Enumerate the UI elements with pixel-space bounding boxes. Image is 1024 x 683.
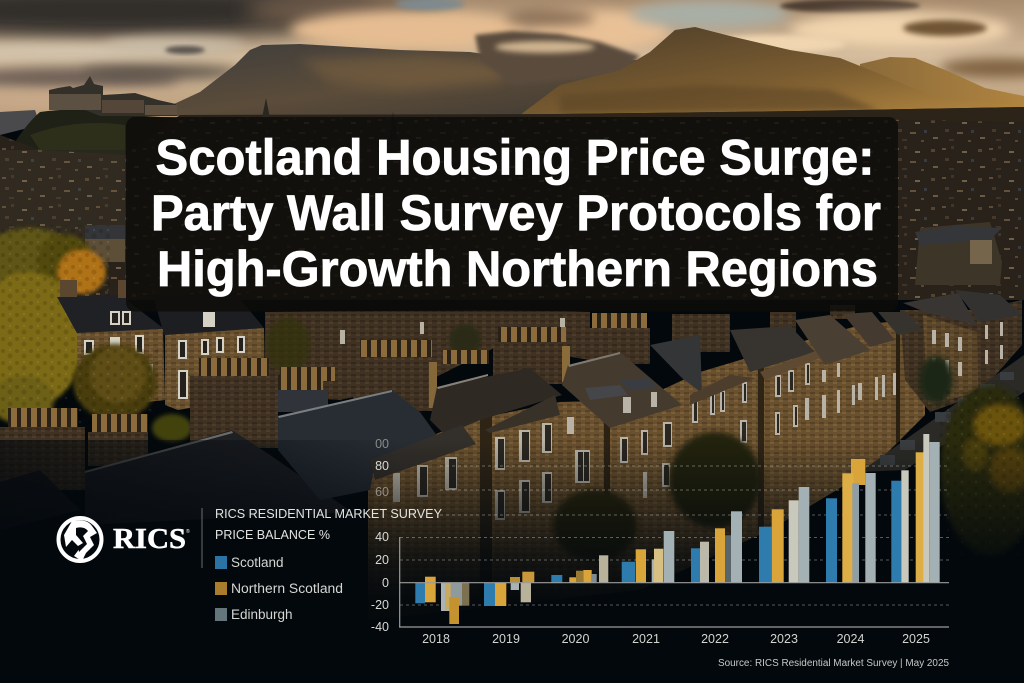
title panel: Party Wall Survey Protocols for xyxy=(151,185,881,241)
title panel: High-Growth Northern Regions xyxy=(157,241,878,297)
upper-left houses xyxy=(57,280,265,410)
year labels: 2023 xyxy=(770,632,798,646)
y axis labels: -20 xyxy=(371,598,389,612)
legend: RICS RESIDENTIAL MARKET SURVEY xyxy=(215,507,443,521)
chimney stacks xyxy=(0,305,855,490)
mountains xyxy=(148,27,1024,118)
sky with clouds xyxy=(0,0,1024,125)
title panel: Scotland Housing Price Surge: xyxy=(156,130,874,186)
distant city xyxy=(0,98,1024,300)
trees upper left xyxy=(0,225,110,425)
year labels: 2019 xyxy=(492,632,520,646)
source note: Source: RICS Residential Market Survey | May 2025 xyxy=(718,658,949,669)
divider xyxy=(202,508,203,568)
bar chart xyxy=(371,434,949,646)
y axis labels: 80 xyxy=(375,459,389,473)
bars 2021 xyxy=(622,531,674,583)
y axis labels: -40 xyxy=(371,620,389,634)
legend: Scotland xyxy=(231,555,284,570)
RICS logo: RICS xyxy=(113,524,186,555)
y axis labels: 20 xyxy=(375,553,389,567)
terrace windows xyxy=(393,322,1003,520)
y axis labels: 60 xyxy=(375,485,389,499)
legend: Northern Scotland xyxy=(231,581,343,596)
bars 2025 xyxy=(891,434,940,583)
tree by houses xyxy=(73,344,192,442)
bars 2019 xyxy=(484,572,534,606)
year labels: 2025 xyxy=(902,632,930,646)
terrace facades xyxy=(368,300,1022,620)
legend xyxy=(215,507,443,622)
castle on rock xyxy=(0,76,200,160)
middle row of houses behind chimneys xyxy=(265,310,590,400)
RICS logo xyxy=(58,518,190,561)
year labels: 2020 xyxy=(562,632,589,646)
year labels: 2018 xyxy=(422,632,450,646)
y axis labels: 00 xyxy=(375,437,389,451)
RICS logo: ® xyxy=(186,528,190,535)
title panel xyxy=(126,117,898,312)
year labels: 2021 xyxy=(632,632,660,646)
year labels: 2022 xyxy=(701,632,729,646)
axes xyxy=(399,537,949,627)
dark fade at bottom xyxy=(0,440,1024,683)
y axis labels: 40 xyxy=(375,530,389,544)
street trees xyxy=(553,356,1024,561)
y axis labels xyxy=(371,437,389,634)
year labels: 2024 xyxy=(837,632,864,646)
grid lines xyxy=(400,466,949,605)
bars 2020 xyxy=(551,555,608,583)
bars 2024 xyxy=(826,459,876,583)
street with parked cars xyxy=(860,355,1024,472)
bars 2023 xyxy=(759,487,809,583)
legend: PRICE BALANCE % xyxy=(215,528,330,542)
bars 2022 xyxy=(691,511,742,583)
window panes xyxy=(420,365,809,518)
y axis labels: 0 xyxy=(382,576,389,590)
year labels xyxy=(422,632,930,646)
bars 2018 xyxy=(415,577,469,624)
legend: Edinburgh xyxy=(231,607,293,622)
slate roofs xyxy=(0,290,1022,530)
